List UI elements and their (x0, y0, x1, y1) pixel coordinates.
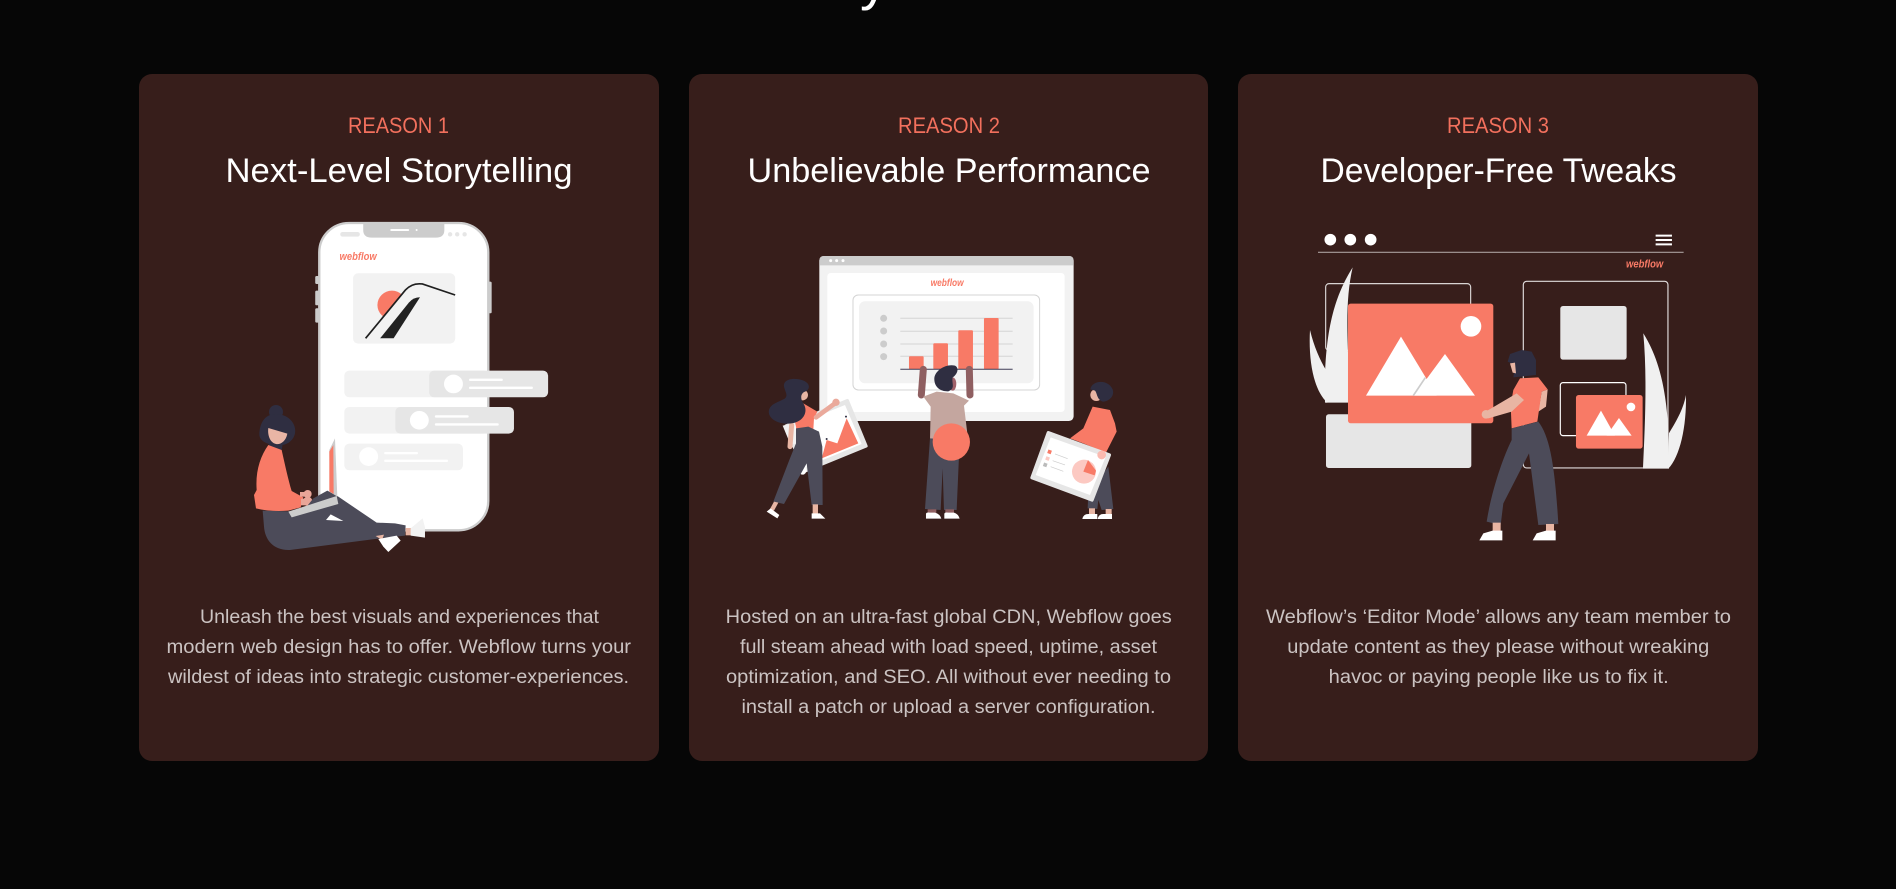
body text 3: update content as they please without wreaking (1287, 637, 1709, 658)
browser window with bar chart: webflow (931, 278, 965, 289)
body text 3: Webflow’s ‘Editor Mode’ allows any team member to (1266, 607, 1731, 628)
illustration: editor layout with person (1310, 234, 1686, 540)
body text 2: optimization, and SEO. All without ever needing to (726, 667, 1171, 688)
card background 1 (139, 74, 659, 761)
standing woman (1479, 350, 1558, 540)
panel: reason 3 (1238, 74, 1758, 761)
body text 2 (726, 607, 1172, 718)
illustration: phone with seated person (254, 223, 548, 552)
label: reason 3: REASON 3 (1447, 113, 1549, 138)
label: reason 2: REASON 2 (898, 113, 1000, 138)
editor frames and images (1310, 234, 1686, 469)
body text 3 (1266, 607, 1731, 688)
woman holding tablet (767, 365, 970, 519)
body text 2: full steam ahead with load speed, uptime, asset (740, 637, 1158, 658)
illustration: browser chart with three people (767, 256, 1117, 519)
body text 2: install a patch or upload a server configuration. (742, 697, 1156, 718)
heading: unbelievable performance: Unbelievable Performance (748, 152, 1150, 190)
body text 2: Hosted on an ultra-fast global CDN, Webflow goes (726, 607, 1172, 628)
phone: webflow (340, 251, 378, 263)
seated person with laptop (254, 405, 425, 552)
heading: developer-free tweaks: Developer-Free Tweaks (1320, 152, 1676, 190)
body text 1: wildest of ideas into strategic customer-experiences. (167, 667, 629, 688)
editor frames and images: webflow (1626, 258, 1664, 270)
browser window with bar chart (819, 256, 1074, 421)
label: reason 1: REASON 1 (348, 113, 449, 138)
card background 2 (689, 74, 1208, 761)
body text 1 (166, 607, 632, 688)
man reaching up (921, 365, 970, 519)
person holding tablet with pie chart (1032, 382, 1117, 519)
phone (315, 223, 548, 530)
body text 1: Unleash the best visuals and experiences that (200, 607, 600, 628)
body text 1: modern web design has to offer. Webflow turns your (166, 637, 632, 658)
card background 3 (1238, 74, 1758, 761)
heading: next-level storytelling: Next-Level Storytelling (226, 152, 572, 190)
body text 3: havoc or paying people like us to fix it. (1329, 667, 1669, 688)
panel: reason 2 (689, 74, 1208, 761)
panel: reason 1 (139, 74, 659, 761)
